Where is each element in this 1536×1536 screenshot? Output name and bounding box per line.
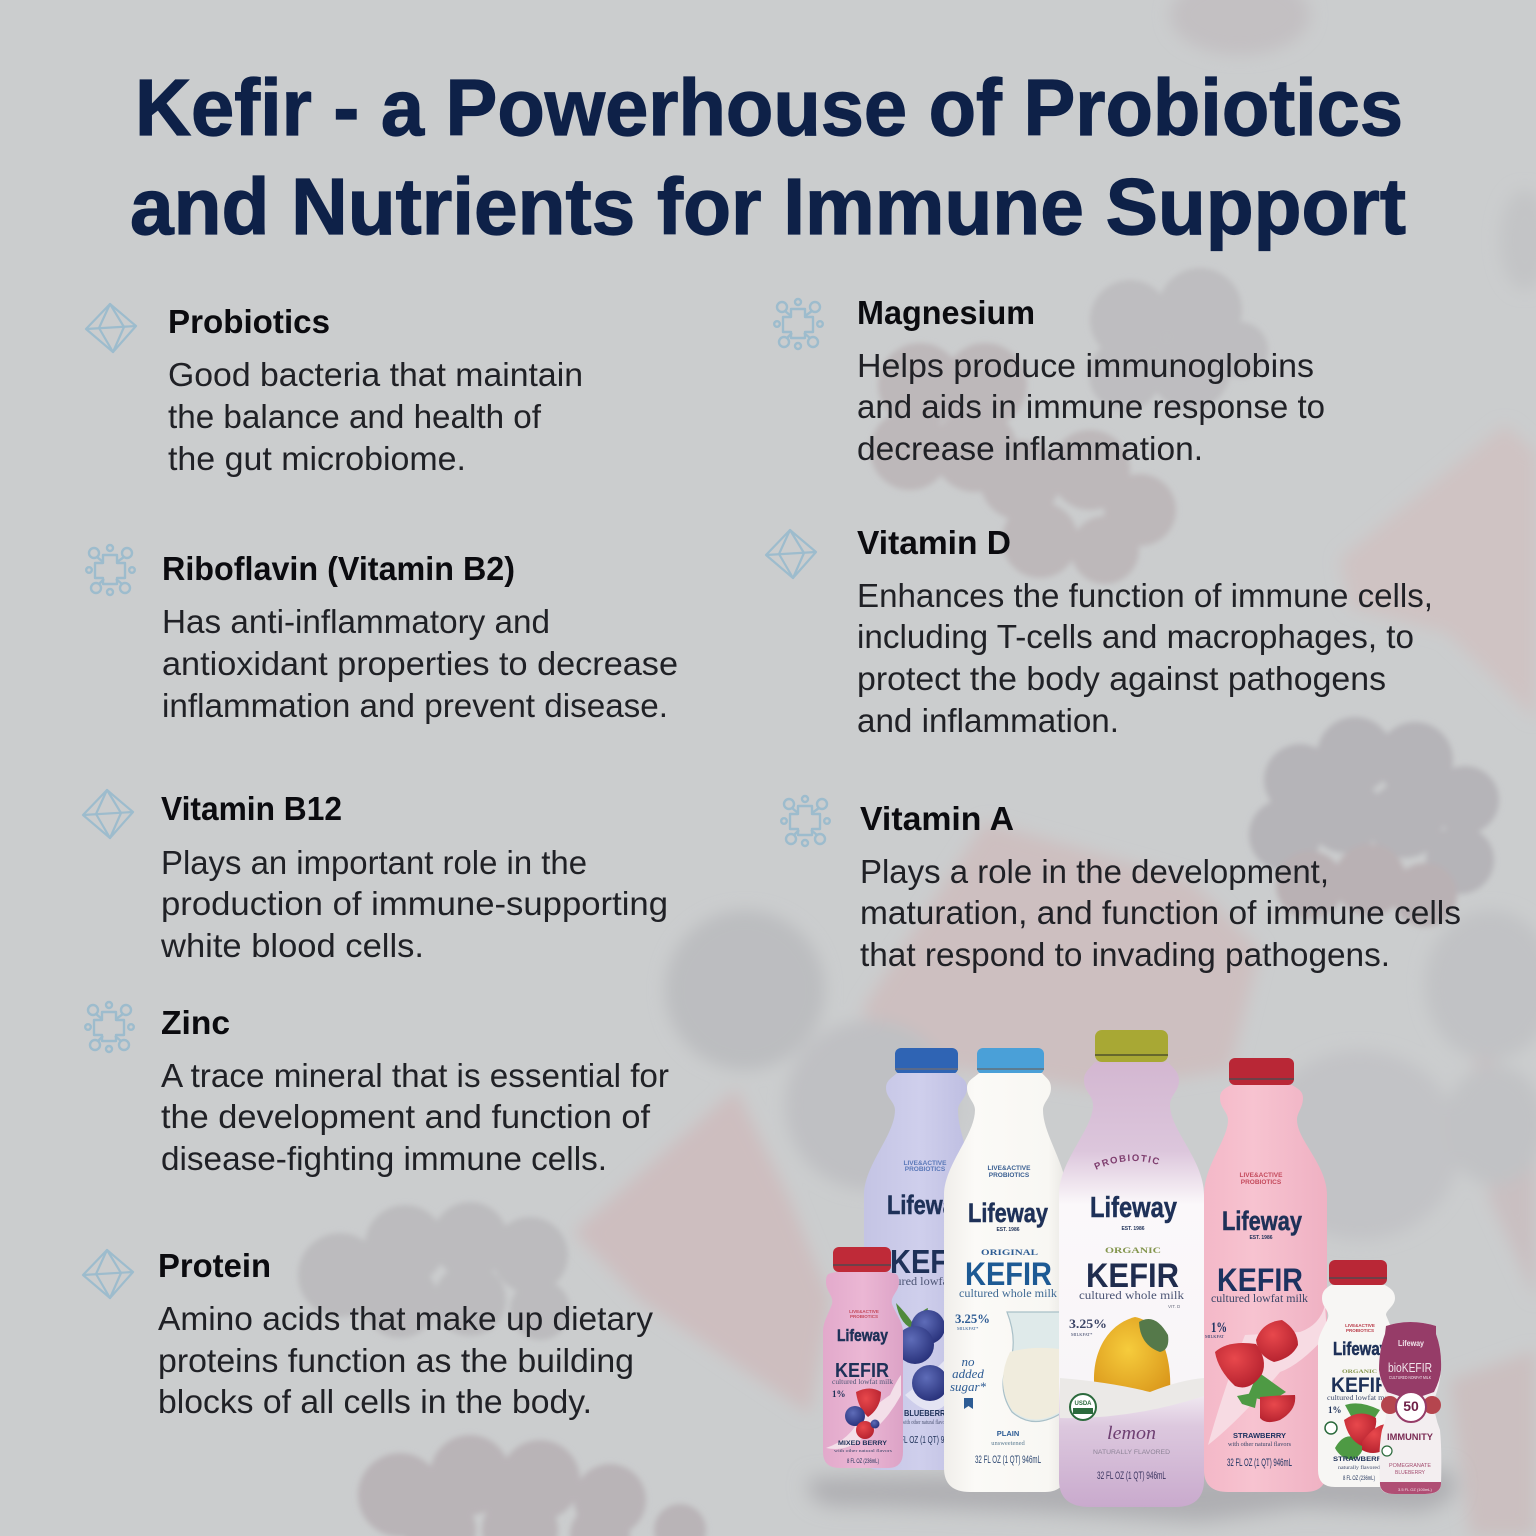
text: Probiotics description: the gut microbiome. [168,440,466,477]
text: Vitamin A description [860,853,1461,973]
panel: Vitamin B12 [83,790,668,964]
heading: Probiotics: Probiotics [168,303,330,340]
bottle: small mixed berry [823,1247,903,1468]
text: Zinc description: the development and function of [161,1098,651,1135]
bottle: plain original: no [962,1354,975,1369]
icon: puzzle [781,796,830,846]
bottle: small mixed berry: cultured lowfat milk [832,1378,894,1386]
bottle: organic lemon: Lifeway [1090,1192,1177,1224]
bottle: blueberry: with other natural flavors [902,1419,948,1426]
bottle: small organic strawberry: Lifeway [1333,1339,1388,1359]
bottle: small organic strawberry: naturally flavored [1338,1466,1381,1471]
bottle: plain original: MILKFAT* [957,1326,979,1331]
text: Vitamin A description: that respond to invading pathogens. [860,936,1390,973]
text: Vitamin D description [857,577,1433,739]
bottle: plain original: EST. 1986 [996,1227,1020,1233]
bottle: strawberry: cultured lowfat milk [1211,1291,1308,1305]
bottle: strawberry: with other natural flavors [1228,1441,1292,1448]
bottle: bioKEFIR immunity: IMMUNITY [1387,1432,1433,1442]
text: Zinc description [161,1057,669,1177]
text: Magnesium description [857,347,1325,467]
text: Vitamin A description: maturation, and function of immune cells [860,894,1461,931]
text: Protein description [158,1300,653,1420]
text: Riboflavin description [162,603,678,724]
bottle: bioKEFIR immunity: POMEGRANATE [1389,1463,1431,1469]
icon: puzzle [85,1002,134,1052]
bottle: plain original: added [952,1366,984,1381]
icon: puzzle [86,545,135,595]
heading: Vitamin B12: Vitamin B12 [161,790,342,827]
text: Protein description: proteins function as the building [158,1342,634,1379]
bottle: small mixed berry: 8 FL OZ (236mL) [847,1459,879,1465]
background: blackberry clusters [298,268,1499,1536]
heading: Vitamin D: Vitamin D [857,524,1011,561]
text: Protein description: blocks of all cells in the body. [158,1383,592,1420]
bottle: small mixed berry: PROBIOTICS [850,1314,878,1319]
icon: diamond [83,1250,133,1298]
bottle: plain original: 3.25% [955,1311,990,1326]
text: Riboflavin description: Has anti-inflammatory and [162,603,550,640]
bottle: strawberry: 1% [1211,1320,1227,1336]
bottle: blueberry: LIVE&ACTIVE [904,1160,947,1167]
text: Probiotics description: Good bacteria that maintain [168,356,583,393]
bottle: organic lemon: 32 FL OZ (1 QT) 946mL [1097,1470,1166,1482]
text: Vitamin A description: Plays a role in the development, [860,853,1329,890]
bottle: organic lemon: KEFIR [1086,1257,1179,1295]
bottle: bioKEFIR immunity: 50 [1403,1398,1419,1414]
bottle: organic lemon: 3.25% [1069,1316,1107,1331]
bottle: blueberry [864,1048,977,1470]
bottle: plain original: PROBIOTICS [989,1172,1030,1179]
bottle shadow [809,1470,1456,1522]
heading: Vitamin A: Vitamin A [860,800,1014,837]
bottle: strawberry: 32 FL OZ (1 QT) 946mL [1227,1457,1292,1469]
bottle: plain original: unsweetened [991,1440,1026,1447]
bottle: organic lemon: NATURALLY FLAVORED [1093,1449,1170,1456]
bottle: small organic strawberry [1318,1260,1395,1487]
bottle: plain original: LIVE&ACTIVE [988,1165,1031,1172]
title [130,63,1406,251]
bottle: small mixed berry: KEFIR [835,1360,890,1382]
bottle: organic lemon: lemon [1107,1423,1156,1444]
panel: Probiotics [86,303,583,477]
bottle: small mixed berry: 1% [832,1389,846,1399]
text: Zinc description: disease-fighting immune cells. [161,1140,607,1177]
bottle: plain original: ORIGINAL [981,1247,1038,1257]
text: Vitamin B12 description: Plays an important role in the [161,844,587,881]
bottle: small organic strawberry: KEFIR [1331,1374,1389,1397]
icon: puzzle [774,299,823,349]
bottle: blueberry: Lifeway [887,1190,967,1220]
bottle: bioKEFIR immunity: Lifeway [1398,1338,1424,1348]
text: Vitamin B12 description [160,844,668,964]
bottle: bioKEFIR immunity: CULTURED NONFAT MILK [1389,1375,1431,1380]
bottle: small organic strawberry: 8 FL OZ (236mL) [1343,1475,1375,1482]
bottle: plain original: KEFIR [965,1256,1052,1292]
text: Vitamin B12 description: production of immune-supporting [161,885,668,922]
text: Zinc description: A trace mineral that is essential for [161,1057,669,1094]
bottle: bioKEFIR immunity: 3.5 FL OZ (100mL) [1398,1487,1433,1492]
bottle: organic lemon: VIT. D [1168,1304,1181,1309]
panel: Vitamin A [781,796,1461,973]
bottle: blueberry: PROBIOTICS [905,1166,946,1173]
bottle: organic lemon [1059,1030,1204,1507]
title: Kefir - a Powerhouse of Probiotics [135,63,1403,152]
bottle: blueberry: BLUEBERRY [904,1408,950,1418]
text: Magnesium description: and aids in immune response to [857,388,1325,425]
bottle: bioKEFIR immunity [1379,1322,1441,1494]
bottle: small mixed berry: LIVE&ACTIVE [849,1309,879,1314]
icon: diamond [86,304,136,352]
bottle: strawberry: EST. 1986 [1249,1235,1273,1241]
bottle: strawberry: MILKFAT [1205,1334,1224,1339]
bottle: small organic strawberry: STRAWBERRY [1333,1456,1388,1463]
text: Magnesium description: decrease inflammation. [857,430,1203,467]
bottle: small mixed berry: Lifeway [837,1326,888,1345]
panel: Vitamin D [766,524,1433,739]
text: Magnesium description: Helps produce immunoglobins [857,347,1314,384]
bottle: plain original: Lifeway [968,1198,1048,1228]
bottle: strawberry [1204,1058,1327,1492]
bottle: organic lemon: PROBIOTIC [1094,1154,1160,1170]
text: Vitamin D description: Enhances the function of immune cells, [857,577,1433,614]
bottle: strawberry: LIVE&ACTIVE [1240,1172,1283,1179]
panel: Magnesium [774,294,1325,467]
bottle: organic lemon: EST. 1986 [1121,1226,1145,1232]
bottle: organic lemon: MILKFAT* [1071,1332,1093,1337]
product group: kefir bottles [806,1030,1458,1528]
bottle: small organic strawberry: LIVE&ACTIVE [1345,1323,1375,1328]
bottle: plain original: PLAIN [997,1429,1019,1438]
bottle: organic lemon: cultured whole milk [1079,1288,1184,1302]
bottle: blueberry: KEFIR [890,1243,977,1280]
text: Probiotics description [168,356,583,477]
text: Vitamin D description: protect the body against pathogens [857,660,1386,697]
panel: Riboflavin [86,545,678,724]
text: Protein description: Amino acids that make up dietary [158,1300,653,1337]
icon: diamond [766,530,816,578]
bottle: blueberry: FL OZ (1 QT) 94 [900,1435,948,1446]
title: and Nutrients for Immune Support [130,162,1406,251]
text: Vitamin D description: and inflammation. [857,702,1119,739]
bottle: plain original: cultured whole milk [959,1286,1057,1300]
heading: Magnesium: Magnesium [857,294,1035,331]
text: Riboflavin description: inflammation and prevent disease. [162,687,668,724]
bottle: plain original [944,1048,1067,1492]
text: Riboflavin description: antioxidant properties to decrease [162,645,678,682]
bottle: blueberry: cultured lowfat milk [877,1274,977,1288]
bottle: small organic strawberry: 1% [1328,1405,1342,1415]
bottle: strawberry: KEFIR [1217,1262,1303,1298]
text: Probiotics description: the balance and health of [168,398,542,435]
bottle: bioKEFIR immunity: BLUEBERRY [1395,1470,1425,1476]
bottle: plain original: sugar* [950,1379,987,1394]
bottle: bioKEFIR immunity: bioKEFIR [1388,1360,1432,1375]
text: Vitamin B12 description: white blood cells. [160,927,424,964]
bottle: small organic strawberry: cultured lowfat milk [1327,1393,1393,1402]
bottle: strawberry: PROBIOTICS [1241,1179,1282,1186]
bottle: small organic strawberry: PROBIOTICS [1346,1328,1374,1333]
heading: Protein: Protein [158,1247,271,1284]
bottle: strawberry: Lifeway [1222,1206,1302,1236]
bottle: small organic strawberry: ORGANIC [1342,1369,1377,1375]
bottle: small mixed berry: MIXED BERRY [838,1440,888,1447]
icon: diamond [83,790,133,838]
bottle: small mixed berry: with other natural flavors [834,1448,892,1453]
bottle: organic lemon: USDA [1074,1401,1092,1407]
panel: Protein [83,1247,653,1420]
text: Vitamin D description: including T-cells and macrophages, to [857,618,1414,655]
bottle: plain original: 32 FL OZ (1 QT) 946mL [975,1454,1041,1466]
bottle: organic lemon: ORGANIC [1105,1245,1161,1255]
heading: Zinc: Zinc [161,1004,230,1041]
bottle: strawberry: STRAWBERRY [1233,1431,1286,1440]
panel: Zinc [85,1002,669,1177]
heading: Riboflavin: Riboflavin (Vitamin B2) [162,550,515,587]
